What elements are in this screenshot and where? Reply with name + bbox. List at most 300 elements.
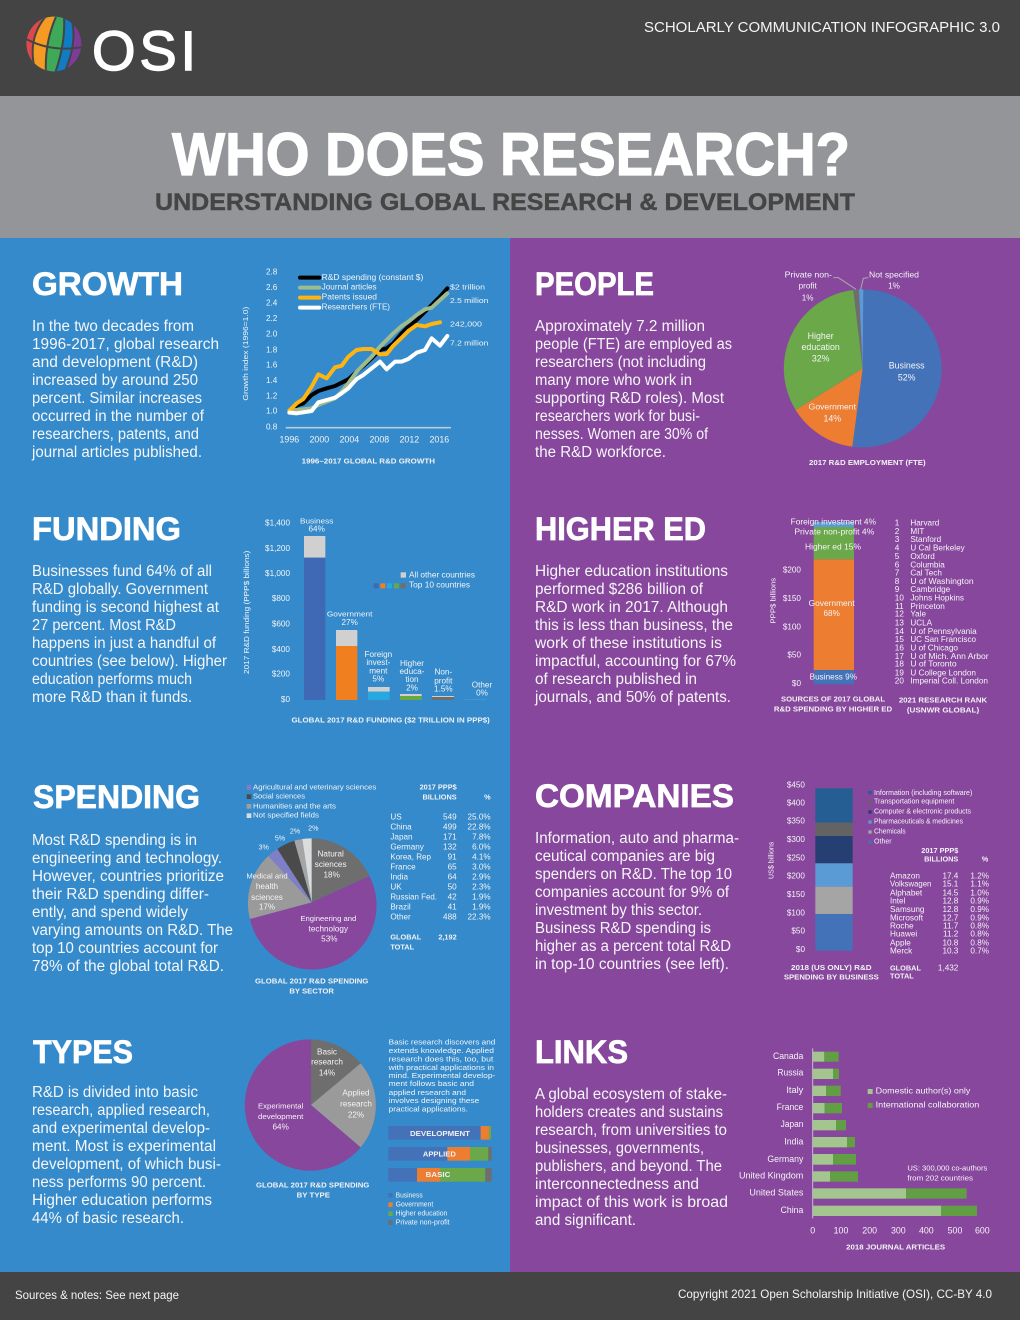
chart: higher ed sources stack: $50: [787, 651, 801, 660]
chart: growth lines: 1.0: [266, 406, 278, 415]
text: higher ed body: journals, and 50% of patents.: [534, 689, 731, 706]
chart: business spending stack and company table: $200: [787, 872, 805, 881]
list: university research rank: 10: [895, 594, 904, 603]
table: spending by country: Brazil: [390, 903, 411, 912]
chart: business spending stack and company table: $300: [787, 835, 805, 844]
table: spending by country: 171: [443, 833, 457, 842]
list: university research rank: Imperial Coll. London: [910, 677, 988, 686]
chart: higher ed sources stack: 2021 RESEARCH RANK: [899, 696, 988, 705]
chart: spending by sector pie and country table: 18%: [324, 871, 340, 880]
list: university research rank: Oxford: [910, 552, 935, 561]
text: growth body: researchers, patents, and: [32, 426, 199, 443]
text: growth body: occurred in the number of: [32, 408, 205, 425]
chart: employment pie: 52%: [898, 373, 916, 383]
list: university research rank: U of Pennsylvania: [910, 627, 977, 636]
panel: types: [32, 1034, 496, 1227]
table: spending by country: 25.0%: [468, 813, 491, 822]
text: spending body: their R&D spending differ-: [32, 886, 209, 903]
table: spending by country: %: [484, 792, 491, 801]
chart: funding bars: $800: [272, 594, 290, 603]
text: people body: researchers (not including: [535, 354, 706, 371]
text: types body: 44% of basic research.: [32, 1210, 184, 1227]
chart: higher ed sources stack: Higher ed 15%: [805, 542, 861, 551]
list: university research rank: 15: [895, 635, 904, 644]
chart: funding bars: $200: [272, 670, 290, 679]
text: companies body: spenders on R&D. The top 10: [535, 866, 732, 883]
text: types body: [32, 1084, 221, 1227]
chart: spending by type pie and bars: BY TYPE: [297, 1191, 330, 1200]
table: spending by country: GLOBAL: [390, 933, 422, 942]
chart: business spending stack and company table: $100: [787, 908, 805, 917]
chart: employment pie: Government: [809, 403, 857, 412]
list: university research rank: 17: [895, 652, 904, 661]
text: links body: publishers, and beyond. The: [535, 1158, 722, 1175]
chart: funding bars: $400: [272, 645, 290, 654]
table: spending by country: 1.9%: [472, 903, 491, 912]
chart: spending by sector pie and country table: Not specified fields: [253, 812, 319, 820]
chart: journal articles by country: 400: [919, 1225, 934, 1235]
table: spending by country: Germany: [390, 843, 425, 852]
chart: funding bars: tion: [405, 675, 419, 684]
chart: funding bars: profit: [434, 677, 453, 686]
text: funding body: happens in just a handful of: [32, 635, 217, 652]
chart: spending by sector pie and country table: GLOBAL 2017 R&D SPENDING: [255, 977, 369, 986]
chart: spending by sector pie and country table: BY SECTOR: [289, 987, 335, 996]
text: links body: [535, 1086, 728, 1229]
text: type definitions: ment follows basic and: [389, 1080, 474, 1088]
text: higher ed body: Higher education institutions: [535, 563, 728, 580]
text: type definitions: Basic research discovers and: [389, 1039, 495, 1047]
text: higher ed body: [534, 563, 736, 706]
list: university research rank: UC San Francisco: [910, 635, 976, 644]
chart: spending by sector pie and country table: [246, 783, 491, 996]
icon: OSI globe logo: [26, 16, 82, 72]
table: top companies: 0.7%: [970, 947, 989, 956]
text: people body: researchers work for busi-: [535, 408, 700, 425]
chart: growth lines: [242, 268, 488, 466]
text: companies body: investment by this sector.: [535, 902, 702, 919]
chart: journal articles by country: [739, 1048, 990, 1251]
list: university research rank: U of Toronto: [910, 660, 957, 669]
list: university research rank: 3: [895, 535, 900, 544]
text: companies body: in top-10 countries (see left).: [535, 956, 729, 973]
table: top companies: 1,432: [938, 964, 959, 973]
list: university research rank: U of Chicago: [910, 644, 958, 653]
table: top companies: TOTAL: [890, 972, 914, 981]
chart: employment pie: profit: [799, 282, 817, 291]
table: top companies: 0.8%: [970, 939, 989, 948]
text: spending body: ently, and spend widely: [32, 904, 188, 921]
chart: funding bars: $0: [281, 695, 290, 704]
table: top companies: GLOBAL: [890, 964, 921, 973]
chart: funding bars: Government: [327, 611, 372, 619]
chart: higher ed sources stack: $100: [783, 623, 801, 632]
list: university research rank: Cambridge: [910, 585, 951, 594]
chart: journal articles by country: Italy: [786, 1085, 804, 1095]
list: university research rank: 1: [895, 519, 900, 528]
list: university research rank: 6: [895, 560, 900, 569]
chart: growth lines: 1996–2017 GLOBAL R&D GROWTH: [302, 457, 435, 466]
table: top companies: 11.7: [943, 921, 959, 930]
chart: employment pie: 2017 R&D EMPLOYMENT (FTE): [809, 458, 926, 467]
list: university research rank: 19: [895, 669, 904, 678]
chart: spending by type pie and bars: 22%: [348, 1111, 364, 1120]
table: top companies: 11.2: [943, 930, 959, 939]
chart: higher ed sources stack: R&D SPENDING BY HIGHER ED: [774, 704, 892, 713]
chart: funding bars: GLOBAL 2017 R&D FUNDING ($2 TRILLION IN PPP$): [291, 715, 490, 724]
text: people body: people (FTE) are employed as: [535, 336, 732, 353]
table: top companies: 17.4: [942, 872, 959, 881]
text: people body: supporting R&D roles). Most: [535, 390, 725, 407]
chart: employment pie: 14%: [823, 414, 841, 424]
chart: business spending stack and company table: $450: [787, 780, 805, 789]
chart: higher ed sources stack: $150: [783, 594, 801, 603]
chart: journal articles by country: United Kingdom: [739, 1171, 803, 1181]
list: university research rank: 4: [895, 544, 900, 553]
list: university research rank: 13: [895, 619, 904, 628]
text: companies body: Information, auto and pharma-: [535, 830, 739, 847]
text: companies body: Business R&D spending is: [535, 920, 711, 937]
table: top companies: %: [982, 855, 989, 864]
panel: spending: [32, 779, 491, 996]
heading: higher ed: HIGHER ED: [535, 511, 706, 547]
table: spending by country: 64: [448, 873, 457, 882]
chart: spending by sector pie and country table: Engineering and: [300, 915, 356, 923]
table: top companies: 12.8: [942, 897, 959, 906]
title band: [0, 96, 1020, 238]
chart: funding bars: Other: [472, 681, 492, 690]
table: top companies: 12.7: [942, 913, 959, 922]
text: growth body: and development (R&D): [32, 354, 198, 371]
chart: spending by sector pie and country table: sciences: [251, 893, 283, 902]
text: people body: nesses. Women are 30% of: [535, 426, 709, 443]
text: people body: many more who work in: [535, 372, 692, 389]
table: top companies: Samsung: [890, 905, 925, 914]
text: companies body: ceutical companies are big: [535, 848, 715, 865]
chart: spending by type pie and bars: 14%: [319, 1069, 335, 1078]
chart: higher ed sources stack: Private non-profit 4%: [794, 528, 874, 537]
text: links body: holders creates and sustains: [535, 1104, 723, 1121]
list: university research rank: 16: [895, 644, 904, 653]
text: types body: Higher education performs: [32, 1192, 212, 1209]
chart: spending by sector pie and country table: Social sciences: [253, 793, 305, 801]
chart: spending by type pie and bars: Government: [396, 1201, 433, 1209]
chart: journal articles by country: Russia: [777, 1068, 803, 1078]
chart: journal articles by country: China: [781, 1205, 803, 1215]
text: higher ed body: impactful, accounting for 67%: [535, 653, 736, 670]
list: university research rank: U College London: [910, 669, 976, 678]
chart: funding bars: All other countries: [409, 571, 475, 580]
table: top companies: Amazon: [890, 872, 920, 881]
list: university research rank: U of Washington: [910, 577, 974, 586]
chart: employment pie: education: [802, 342, 840, 352]
table: spending by country: France: [390, 863, 416, 872]
list: university research rank: 2: [895, 527, 900, 536]
text: growth body: [31, 318, 219, 461]
text: funding body: education performs much: [32, 671, 192, 688]
chart: funding bars: 64%: [309, 525, 325, 534]
text: type definitions: extends knowledge. Applied: [389, 1047, 494, 1055]
chart: employment pie: [784, 271, 942, 467]
chart: business spending stack and company table: $350: [787, 817, 805, 826]
text: type definitions: mind. Experimental develop-: [389, 1072, 496, 1080]
chart: funding bars: $1,400: [265, 519, 290, 528]
bars: funder split by type: [388, 1126, 492, 1182]
chart: higher ed sources stack: $0: [792, 679, 801, 688]
chart: journal articles by country: United States: [749, 1188, 804, 1198]
text: spending body: engineering and technology.: [32, 850, 222, 867]
chart: employment pie: 1%: [888, 281, 900, 290]
list: university research rank: 18: [895, 660, 904, 669]
chart: growth lines: 242,000: [450, 321, 482, 329]
heading: links: LINKS: [535, 1034, 628, 1070]
list: university research rank: 8: [895, 577, 900, 586]
chart: spending by type pie and bars: research: [340, 1100, 372, 1109]
chart: funding bars: educa-: [400, 667, 425, 676]
text: people body: [535, 318, 732, 461]
table: top companies: 0.8%: [970, 921, 989, 930]
panel: purple column background: [510, 238, 1020, 1272]
table: top companies: 0.9%: [970, 897, 989, 906]
header bar: [26, 16, 1000, 72]
table: spending by country: 2017 PPP$: [420, 783, 457, 792]
chart: business spending stack and company table: Information (including software): [874, 789, 972, 797]
chart: employment pie: 32%: [812, 354, 830, 364]
chart: spending by type pie and bars: Business: [396, 1192, 423, 1200]
chart: growth lines: 2.5 million: [450, 297, 488, 305]
list: university research rank: Stanford: [910, 535, 942, 544]
table: spending by country: 1.9%: [472, 893, 491, 902]
chart: journal articles by country: 300: [891, 1225, 906, 1235]
table: top companies: 1.0%: [970, 889, 989, 898]
chart: journal articles by country: from 202 countries: [907, 1174, 973, 1182]
chart: growth lines: 2016: [430, 434, 449, 444]
text: types body: ness performs 90 percent.: [32, 1174, 206, 1191]
table: top companies: Microsoft: [890, 913, 924, 922]
text: spending body: Most R&D spending is in: [32, 832, 197, 849]
chart: journal articles by country: Canada: [773, 1051, 803, 1061]
text: types body: R&D is divided into basic: [32, 1084, 198, 1101]
chart: business spending stack and company table: $50: [791, 927, 805, 936]
table: top companies: 0.9%: [970, 913, 989, 922]
chart: business spending stack and company table: US$ billions: [767, 841, 775, 879]
chart: spending by sector pie and country table: Medical and: [246, 873, 288, 881]
list: university research rank: U of Mich. Ann Arbor: [910, 652, 989, 661]
text: higher ed body: performed $286 billion of: [535, 581, 704, 598]
chart: funding bars: 2017 R&D funding (PPP$ billions): [243, 551, 251, 674]
chart: growth lines: 1.6: [266, 361, 278, 370]
heading: spending: SPENDING: [33, 779, 200, 815]
panel: people: [535, 266, 942, 467]
table: spending by country: 6.0%: [472, 843, 491, 852]
text: funding body: Businesses fund 64% of all: [32, 563, 212, 580]
chart: spending by type pie and bars: Basic: [317, 1048, 337, 1057]
chart: funding bars: invest-: [366, 658, 391, 667]
text: companies body: companies account for 9% of: [535, 884, 730, 901]
chart: growth lines: $2 trillion: [450, 284, 485, 292]
panel: funding: [32, 511, 492, 724]
chart: spending by type pie and bars: GLOBAL 2017 R&D SPENDING: [256, 1181, 370, 1190]
text: higher ed body: work of these institutions is: [534, 635, 722, 652]
chart: employment pie: 1%: [802, 293, 814, 302]
text: spending body: 78% of the global total R&D.: [32, 958, 224, 975]
table: spending by country: BILLIONS: [422, 792, 457, 801]
panel: growth: [31, 266, 488, 466]
text: type definitions: practical applications.: [389, 1105, 468, 1113]
series label: SCHOLARLY COMMUNICATION INFOGRAPHIC 3.0: [644, 20, 1000, 36]
table: top companies: 15.1: [942, 880, 959, 889]
table: spending by country: 488: [443, 913, 457, 922]
table: top companies: Alphabet: [890, 889, 923, 898]
table: spending by country: 2.9%: [472, 873, 491, 882]
chart: higher ed sources stack: Government: [809, 599, 855, 608]
text: funding body: more R&D than it funds.: [32, 689, 192, 706]
text: companies body: [535, 830, 739, 973]
chart: growth lines: 1996: [280, 434, 299, 444]
text: spending body: However, countries prioritize: [32, 868, 224, 885]
list: university research rank: [895, 519, 989, 686]
chart: business spending stack and company table: SPENDING BY BUSINESS: [784, 973, 879, 982]
chart: funding bars: ment: [369, 667, 388, 676]
bars: funder split by type: APPLIED: [423, 1149, 456, 1158]
text: growth body: increased by around 250: [32, 372, 198, 389]
chart: business spending stack and company table: $400: [787, 798, 805, 807]
chart: spending by sector pie and country table: Agricultural and veterinary sciences: [253, 784, 377, 792]
chart: journal articles by country: 600: [975, 1225, 990, 1235]
list: university research rank: MIT: [910, 527, 924, 536]
text: people body: the R&D workforce.: [535, 444, 666, 461]
table: top companies: 10.3: [942, 947, 959, 956]
panel: higher ed: [534, 511, 989, 715]
chart: spending by sector pie and country table: Natural: [318, 850, 344, 859]
table: top companies: Merck: [890, 947, 913, 956]
chart: spending by type pie and bars: Higher education: [396, 1210, 447, 1218]
chart: spending by sector pie and country table: Humanities and the arts: [253, 803, 336, 811]
table: top companies: 1.1%: [970, 880, 989, 889]
chart: growth lines: 2008: [370, 434, 389, 444]
table: top companies: 1.2%: [970, 872, 989, 881]
table: spending by country: Russian Fed.: [390, 893, 437, 902]
list: university research rank: 9: [895, 585, 900, 594]
list: university research rank: Johns Hopkins: [910, 594, 964, 603]
subtitle: UNDERSTANDING GLOBAL RESEARCH & DEVELOPMENT: [155, 189, 855, 216]
chart: spending by sector pie and country table: 5%: [275, 835, 286, 843]
chart: growth lines: 2.4: [266, 299, 278, 308]
chart: funding bars: Non-: [434, 667, 452, 676]
list: university research rank: Yale: [910, 610, 927, 619]
text: links body: A global ecosystem of stake-: [535, 1086, 727, 1103]
table: top companies: BILLIONS: [924, 855, 958, 864]
table: top companies: [890, 846, 989, 981]
table: top companies: Intel: [890, 897, 906, 906]
table: spending by country: 50: [448, 883, 457, 892]
text: funding body: R&D globally. Government: [32, 581, 209, 598]
table: spending by country: 65: [448, 863, 457, 872]
chart: employment pie: Private non-: [785, 271, 832, 280]
table: spending by country: 91: [448, 853, 457, 862]
text: types body: ment. Most is experimental: [32, 1138, 216, 1155]
chart: spending by sector pie and country table: 17%: [259, 902, 275, 911]
table: spending by country: 549: [443, 813, 457, 822]
chart: spending by type pie and bars: Experimental: [258, 1103, 304, 1111]
chart: higher ed sources stack: $200: [783, 566, 801, 575]
list: university research rank: 20: [895, 677, 904, 686]
chart: funding bars: 2%: [406, 684, 418, 693]
list: university research rank: 12: [895, 610, 904, 619]
chart: journal articles by country: Domestic author(s) only: [876, 1087, 971, 1096]
panel: links: [535, 1034, 990, 1251]
chart: spending by type pie and bars: [245, 1039, 496, 1227]
table: top companies: 14.5: [942, 889, 959, 898]
chart: higher ed sources stack: Business 9%: [810, 673, 857, 682]
logo wordmark: OSI: [92, 19, 196, 82]
text: links body: businesses, governments,: [535, 1140, 704, 1157]
chart: spending by type pie and bars: Private non-profit: [396, 1219, 450, 1227]
chart: funding bars: Top 10 countries: [409, 581, 470, 590]
heading: people: PEOPLE: [535, 266, 654, 302]
chart: spending by type pie and bars: 64%: [273, 1123, 289, 1132]
text: spending body: varying amounts on R&D. The: [32, 922, 233, 939]
chart: spending by sector pie and country table: technology: [309, 925, 349, 934]
chart: business spending stack and company table: Computer & electronic products: [874, 808, 971, 816]
chart: growth lines: 2.2: [266, 314, 278, 323]
chart: spending by sector pie and country table: health: [256, 882, 278, 891]
table: spending by country: Other: [390, 913, 411, 922]
list: university research rank: Harvard: [910, 519, 940, 528]
chart: journal articles by country: 100: [834, 1225, 848, 1235]
text: links body: research, from universities to: [535, 1122, 727, 1139]
table: spending by country: 7.8%: [472, 833, 491, 842]
text: types body: development, of which busi-: [32, 1156, 221, 1173]
heading: companies: COMPANIES: [535, 778, 734, 814]
table: spending by country: China: [390, 823, 412, 832]
chart: journal articles by country: 2018 JOURNAL ARTICLES: [846, 1242, 945, 1251]
table: spending by country: 42: [448, 893, 457, 902]
chart: funding bars: Higher: [400, 659, 424, 668]
chart: higher ed sources stack: 68%: [824, 609, 840, 618]
text: companies body: higher as a percent total R&D: [535, 938, 731, 955]
chart: growth lines: 0.8: [266, 423, 278, 432]
text: spending body: [32, 832, 233, 975]
text: type definitions: applied research and: [389, 1089, 466, 1097]
chart: spending by sector pie and country table: sciences: [315, 860, 347, 869]
chart: funding bars: Business: [300, 518, 334, 526]
chart: higher ed sources stack: PPP$ billions: [770, 577, 778, 623]
chart: journal articles by country: 500: [948, 1225, 962, 1235]
chart: business spending stack and company table: Transportation equipment: [874, 798, 954, 806]
sources note: Sources & notes: See next page: [15, 1290, 179, 1302]
list: university research rank: U Cal Berkeley: [910, 544, 966, 553]
table: spending by country: 2.3%: [472, 883, 491, 892]
list: university research rank: 7: [895, 569, 900, 578]
text: types body: research, applied research,: [32, 1102, 210, 1119]
chart: growth lines: 2000: [310, 434, 329, 444]
table: top companies: 2017 PPP$: [921, 846, 958, 855]
chart: higher ed sources stack: [770, 518, 989, 715]
text: funding body: countries (see below). Higher: [32, 653, 227, 670]
chart: journal articles by country: Japan: [781, 1119, 803, 1129]
list: university research rank: Columbia: [910, 560, 945, 569]
table: top companies: 0.9%: [970, 905, 989, 914]
table: spending by country: [390, 783, 491, 952]
chart: spending by type pie and bars: research: [311, 1058, 343, 1067]
table: spending by country: 22.3%: [468, 913, 491, 922]
table: top companies: Apple: [890, 939, 911, 948]
heading: funding: FUNDING: [32, 511, 181, 547]
chart: growth lines: 7.2 million: [450, 340, 488, 348]
chart: spending by sector pie and country table: 2%: [290, 828, 301, 836]
panel: blue column background: [0, 238, 510, 1272]
